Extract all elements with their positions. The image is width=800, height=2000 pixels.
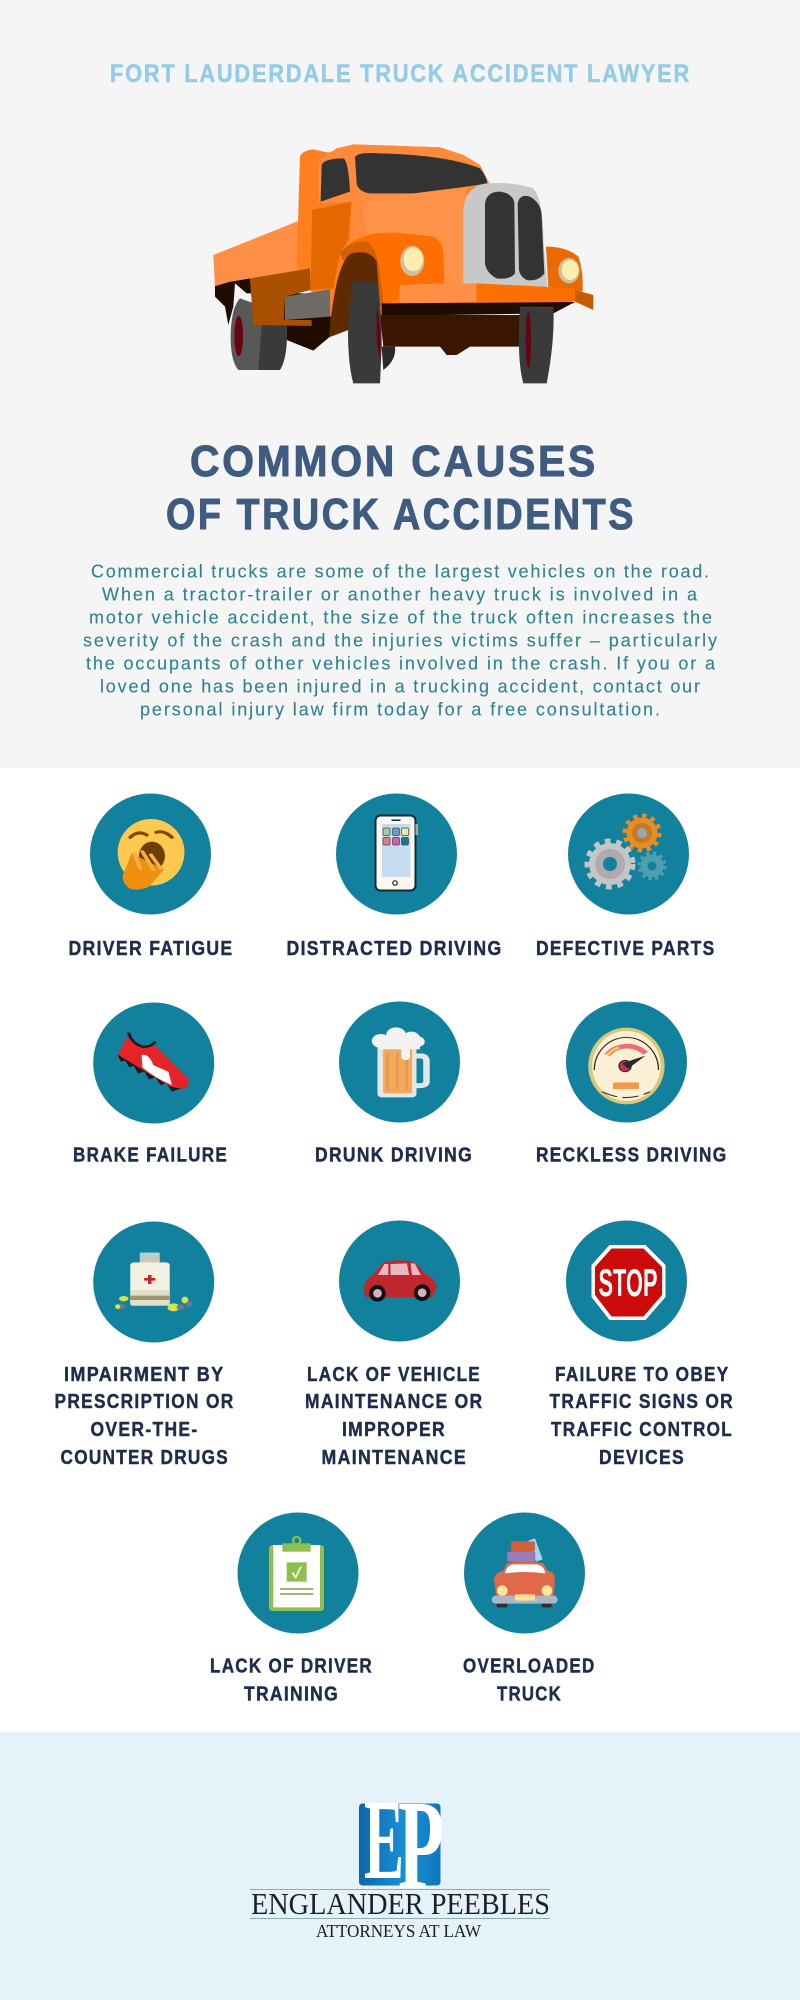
label [550,1364,734,1469]
icon: pill bottle [93,1222,214,1342]
cause: lack of driver training [210,1512,373,1706]
icon: orange dump truck [213,144,593,383]
label: IMPAIRMENT BY [64,1364,224,1386]
cause: overloaded truck [463,1512,596,1706]
cause: lack of vehicle maintenance [305,1220,484,1469]
intro paragraph: loved one has been injured in a trucking accident, contact our [100,676,700,696]
cause: drunk driving [315,1002,473,1166]
label: DISTRACTED DRIVING [286,938,502,960]
logo: Englander Peebles [250,1774,550,1941]
eyebrow title: FORT LAUDERDALE TRUCK ACCIDENT LAWYER [110,60,691,88]
label [210,1656,373,1706]
icon: stop sign: STOP [598,1262,658,1305]
intro paragraph: personal injury law firm today for a free consultation. [140,700,660,720]
icon: beer mug [339,1002,460,1122]
label: COUNTER DRUGS [60,1447,229,1469]
label: TRAINING [244,1684,339,1706]
heading [166,437,636,539]
tagline: ATTORNEYS AT LAW [316,1921,481,1941]
icon: stop sign [566,1220,687,1342]
label: TRAFFIC CONTROL [551,1419,733,1441]
cause: brake failure [73,1002,228,1166]
label: FAILURE TO OBEY [555,1364,730,1386]
label: BRAKE FAILURE [73,1144,228,1166]
cause: distracted driving [286,794,502,960]
panel: header background [0,0,800,768]
label: DEFECTIVE PARTS [536,938,716,960]
logo mark: E [364,1776,404,1903]
intro paragraph: When a tractor-trailer or another heavy truck is involved in a [102,584,698,604]
label: TRAFFIC SIGNS OR [550,1391,734,1413]
icon: red shoe [93,1002,214,1124]
icon: car with luggage [464,1512,585,1634]
cause: defective parts [536,794,716,960]
icon: clipboard [238,1512,358,1634]
panel: causes background [0,768,800,1732]
intro paragraph: severity of the crash and the injuries victims suffer – particularly [83,630,717,650]
label [54,1364,234,1469]
label: OVERLOADED [463,1656,596,1678]
icon: smartphone [336,794,457,914]
label: MAINTENANCE [322,1447,467,1469]
label [305,1364,484,1469]
logo mark: P [398,1774,444,1916]
heading: OF TRUCK ACCIDENTS [166,490,636,539]
icon: gears [568,794,689,914]
icon: yawning face [90,794,211,914]
label: DRUNK DRIVING [315,1144,473,1166]
label: DRIVER FATIGUE [68,938,234,960]
intro paragraph: motor vehicle accident, the size of the truck often increases the [89,608,712,628]
label: PRESCRIPTION OR [54,1391,234,1413]
icon: speedometer [566,1002,687,1122]
label [463,1656,596,1706]
cause: driver fatigue [68,794,234,960]
label: LACK OF VEHICLE [307,1364,481,1386]
intro paragraph: Commercial trucks are some of the largest vehicles on the road. [91,562,709,582]
cause: impairment by drugs [54,1222,234,1469]
firm name: ENGLANDER PEEBLES [251,1886,550,1921]
label: IMPROPER [342,1419,446,1441]
label: RECKLESS DRIVING [536,1144,728,1166]
intro paragraph [83,562,717,720]
label: LACK OF DRIVER [210,1656,373,1678]
intro paragraph: the occupants of other vehicles involved in the crash. If you or a [86,654,716,674]
label: DEVICES [599,1447,685,1469]
icon: red car [339,1220,460,1342]
label: TRUCK [497,1684,562,1706]
cause: reckless driving [536,1002,728,1166]
heading: COMMON CAUSES [190,437,598,486]
cause: failure to obey signs [550,1220,734,1469]
label: MAINTENANCE OR [305,1391,484,1413]
panel: footer background [0,1732,800,2000]
label: OVER-THE- [90,1419,198,1441]
